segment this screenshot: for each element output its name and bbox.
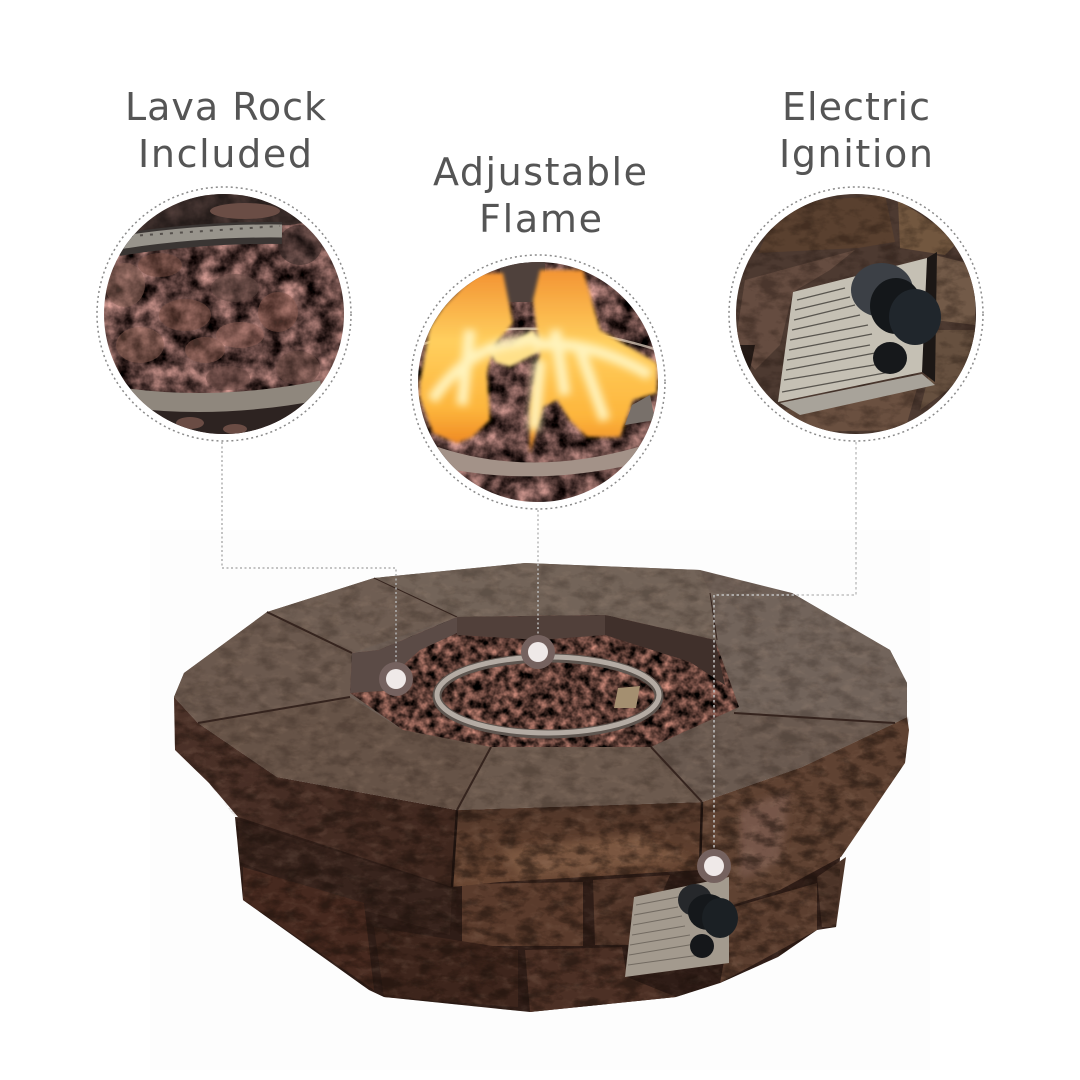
fire pit lower stone courses	[235, 817, 846, 1012]
connector: lava rock	[222, 442, 396, 668]
heading: Electric Ignition: Ignition	[779, 132, 933, 176]
marker: flame	[521, 635, 555, 669]
heading: Lava Rock Included: Lava Rock	[125, 85, 326, 129]
marker: ignition	[697, 849, 731, 883]
gas burner ring	[437, 657, 659, 734]
stone seams	[198, 578, 895, 810]
heading: Adjustable Flame: Flame	[479, 197, 602, 241]
control panel with knobs	[625, 877, 738, 977]
heading: Electric Ignition	[779, 85, 933, 176]
heading: Lava Rock Included: Included	[138, 132, 312, 176]
side face shading	[170, 690, 915, 1015]
photo circle: lava rock	[97, 187, 351, 441]
connector: flame	[537, 510, 539, 642]
connector: ignition	[714, 442, 856, 856]
heading: Adjustable Flame	[433, 150, 647, 241]
photo circle: electric ignition	[729, 187, 983, 441]
fire pit top stones	[174, 563, 907, 810]
heading: Electric Ignition: Electric	[782, 85, 930, 129]
fire pit product	[170, 560, 915, 1015]
heading: Adjustable Flame: Adjustable	[433, 150, 647, 194]
stone texture	[170, 560, 915, 1015]
fire pit rim side faces	[174, 697, 909, 905]
fire pit opening with lava rock	[350, 615, 739, 747]
photo circle: flame	[410, 255, 670, 510]
marker: lava rock	[379, 662, 413, 696]
heading: Lava Rock Included	[125, 85, 326, 176]
